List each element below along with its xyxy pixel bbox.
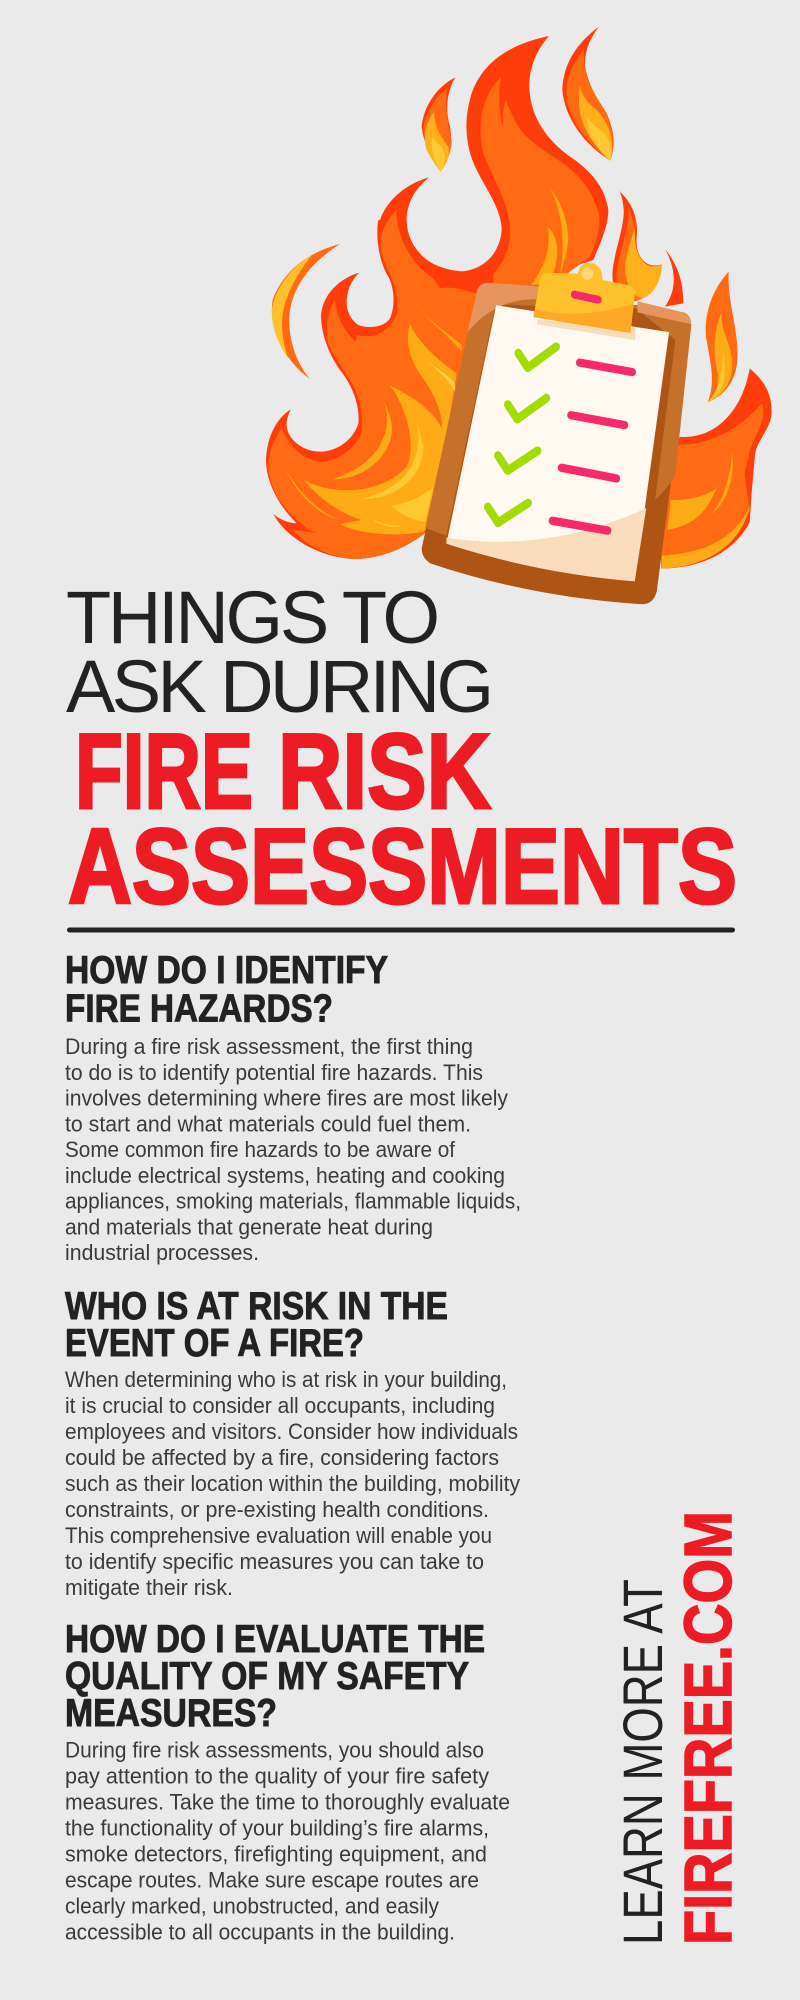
section 1 body: include electrical systems, heating and cooking [65, 1163, 505, 1188]
section 1 body: During a fire risk assessment, the first thing [65, 1034, 473, 1059]
section 2 heading: WHO IS AT RISK IN THE [65, 1285, 448, 1328]
section 1 heading [65, 949, 388, 1030]
section 1 body [65, 1034, 521, 1265]
section 2 body: it is crucial to consider all occupants, including [65, 1393, 495, 1418]
section 3 body: measures. Take the time to thoroughly evaluate [65, 1790, 510, 1814]
clipboard clip [533, 263, 636, 340]
section 3 body: During fire risk assessments, you should also [65, 1738, 484, 1762]
section 1 body: to do is to identify potential fire hazards. This [65, 1060, 483, 1085]
section 3 body: smoke detectors, firefighting equipment, and [65, 1842, 487, 1866]
section 2 body: to identify specific measures you can take to [65, 1549, 484, 1574]
section 3 body: escape routes. Make sure escape routes are [65, 1868, 479, 1892]
section 1 heading: FIRE HAZARDS? [65, 988, 333, 1030]
title [66, 576, 737, 926]
section 2 body: such as their location within the building, mobility [65, 1471, 520, 1496]
section 2 body: When determining who is at risk in your building, [65, 1367, 507, 1392]
flame: near clip [612, 191, 683, 307]
section 2 heading [65, 1285, 448, 1365]
flame: central tongue [378, 36, 608, 320]
section 1 [65, 949, 521, 1265]
clipboard paper [446, 305, 669, 581]
section 2 heading: EVENT OF A FIRE? [65, 1322, 364, 1365]
firefree.com: FIREFREE.COM [671, 1511, 746, 1945]
flames: top [378, 27, 683, 320]
learn more at: LEARN MORE AT [611, 1579, 674, 1945]
section 3 heading: QUALITY OF MY SAFETY [65, 1655, 469, 1698]
flames: left side [266, 210, 493, 559]
title: light lines [66, 576, 494, 728]
flame: main left body [266, 210, 493, 559]
section 2 body: mitigate their risk. [65, 1575, 233, 1600]
title: red lines [68, 711, 737, 926]
flame: top right droplet [562, 27, 614, 161]
section 3 body: the functionality of your building’s fire alarms, [65, 1816, 489, 1840]
section 1 body: and materials that generate heat during [65, 1214, 433, 1239]
section 2 [65, 1285, 520, 1600]
checklist lines [552, 363, 632, 531]
illustration: flames and clipboard [266, 27, 772, 604]
flame: left crescent [272, 244, 340, 379]
title: red lines: FIRE [75, 711, 253, 831]
title: red lines: RISK [278, 711, 491, 831]
flame: top left droplet [422, 77, 455, 172]
title: light lines: THINGS TO [66, 576, 440, 659]
section 3 body: clearly marked, unobstructed, and easily [65, 1894, 439, 1918]
section 3 heading [65, 1618, 485, 1735]
section 2 body: employees and visitors. Consider how individuals [65, 1419, 518, 1444]
section 2 body: This comprehensive evaluation will enable you [65, 1523, 492, 1548]
section 3 [65, 1618, 510, 1944]
flame: right droplet [706, 272, 738, 403]
checklist ticks [488, 347, 556, 523]
section 3 body: accessible to all occupants in the building. [65, 1920, 455, 1944]
section 3 body: pay attention to the quality of your fire safety [65, 1764, 489, 1788]
section 3 heading: HOW DO I EVALUATE THE [65, 1618, 485, 1661]
section 1 body: industrial processes. [65, 1240, 259, 1265]
clipboard board [422, 283, 691, 604]
call to action: vertical text [611, 1511, 746, 1945]
section 1 body: involves determining where fires are most likely [65, 1086, 508, 1110]
section 1 body: appliances, smoking materials, flammable liquids, [65, 1188, 521, 1214]
section 1 body: Some common fire hazards to be aware of [65, 1137, 456, 1162]
section 2 body: could be affected by a fire, considering factors [65, 1445, 499, 1470]
section 1 heading: HOW DO I IDENTIFY [65, 949, 388, 992]
title: light lines: ASK DURING [66, 645, 494, 728]
section 2 body [65, 1367, 520, 1600]
section 3 body [65, 1738, 510, 1944]
flames: right side [660, 272, 772, 569]
section 3 heading: MEASURES? [65, 1692, 277, 1735]
section 1 body: to start and what materials could fuel them. [65, 1111, 471, 1136]
clipboard [422, 263, 691, 604]
section 2 body: constraints, or pre-existing health conditions. [65, 1497, 489, 1522]
flame: right body [660, 369, 772, 569]
